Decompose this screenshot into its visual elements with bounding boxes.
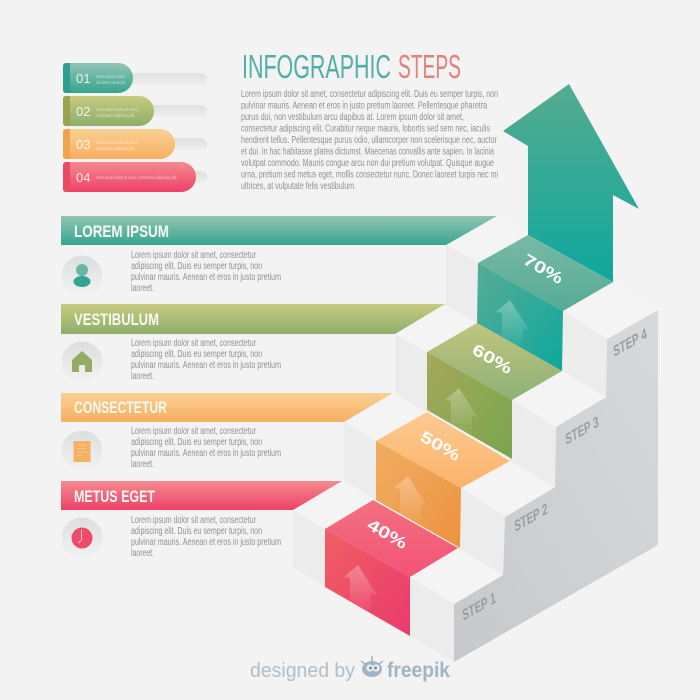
step labels: STEP 3 <box>564 413 600 449</box>
legend item 01 <box>63 63 207 93</box>
section: lorem ipsum <box>61 216 497 296</box>
section: consectetur <box>61 393 393 472</box>
legend item 01: lorem ipsum dolor <box>96 74 125 79</box>
text: lorem ipsum: laoreet. <box>131 283 154 294</box>
step 70 percent teal: 70% <box>520 250 566 288</box>
intro text block: urna, pretium sed metus eget, mollis consectetur nunc. Donec laoreet turpis nec mi <box>241 170 498 180</box>
legend item 02: lorem ipsum dolor sit amet, <box>96 107 138 112</box>
step 50 percent orange <box>376 412 510 548</box>
text: vestibulum: pulvinar mauris. Aenean et eros in justo pretium <box>131 360 281 371</box>
legend item 03: consectetur adipiscing elit. <box>96 146 135 151</box>
title: INFOGRAPHIC <box>242 48 391 85</box>
intro text block: Lorem ipsum dolor sit amet, consectetur adipiscing elit. Duis eu semper turpis, non <box>241 89 498 100</box>
text: metus eget: laoreet. <box>131 548 154 559</box>
text: lorem ipsum: adipiscing elit. Duis eu semper turpis, non <box>131 261 262 272</box>
step labels: STEP 2 <box>513 500 549 536</box>
legend item 02 <box>63 96 207 126</box>
legend item 04: lorem ipsum dolor sit amet, consectetur adipiscing elit. <box>96 175 177 180</box>
text: consectetur: adipiscing elit. Duis eu semper turpis, non <box>131 437 262 448</box>
step labels: STEP 4 <box>612 325 648 361</box>
intro text block: hendrerit tellus. Pellentesque purus odio, ullamcorper non scelerisque nec, auctor <box>241 135 497 146</box>
intro text block: ultrices, at vulputate felis vestibulum. <box>241 181 356 192</box>
step 60 percent olive: 60% <box>469 340 515 378</box>
heading: vestibulum: VESTIBULUM <box>74 310 159 329</box>
footer: designed by freepik <box>250 656 450 682</box>
step 70 percent teal <box>477 235 613 371</box>
heading: metus eget: METUS EGET <box>74 487 155 506</box>
step labels: STEP 1 <box>461 589 497 625</box>
text: metus eget <box>131 515 281 559</box>
icon: document <box>62 430 102 472</box>
icon: person <box>62 256 102 296</box>
text: vestibulum <box>131 338 281 382</box>
legend item 03: lorem ipsum dolor sit amet, <box>96 140 138 145</box>
section: metus eget <box>61 481 342 559</box>
text: lorem ipsum: pulvinar mauris. Aenean et eros in justo pretium <box>131 272 281 283</box>
text: consectetur: Lorem ipsum dolor sit amet, consectetur <box>131 426 256 437</box>
intro text block: consectetur adipiscing elit. Curabitur neque mauris, lobortis sed sem nec, iaculis <box>241 124 490 134</box>
step labels <box>461 325 648 625</box>
intro text block <box>241 89 498 192</box>
banner: vestibulum <box>61 304 445 334</box>
text: consectetur: pulvinar mauris. Aenean et eros in justo pretium <box>131 448 281 459</box>
legend item 03 <box>63 129 207 159</box>
stair side wall <box>454 310 658 662</box>
step 1 white blocks <box>293 481 503 662</box>
legend item 01: sit amet consecte <box>96 80 125 85</box>
step 3 white blocks <box>395 304 606 487</box>
banner: consectetur <box>61 393 393 422</box>
step 40 percent pink <box>325 500 458 636</box>
text: metus eget: pulvinar mauris. Aenean et eros in justo pretium <box>131 537 281 548</box>
big teal arrow <box>503 84 639 282</box>
legend item 02: consectetur adipiscing elit. <box>96 113 135 118</box>
staircase <box>293 216 658 662</box>
text: vestibulum: adipiscing elit. Duis eu semper turpis, non <box>131 349 262 360</box>
text: metus eget: Lorem ipsum dolor sit amet, consectetur <box>131 515 256 526</box>
footer: designed by freepik: freepik <box>387 659 450 682</box>
step 4 white blocks <box>446 216 658 397</box>
icon: freepik mascot <box>361 656 383 677</box>
step 40 percent pink: 40% <box>364 515 410 553</box>
intro text block: et dui. In hac habitasse platea dictumst. Maecenas convallis ante sapien. In lacinia <box>241 146 494 158</box>
intro text block: volutpat commodo. Mauris congue arcu non dui pretium volutpat. Quisque augue <box>241 158 494 169</box>
title: STEPS <box>398 48 461 85</box>
text: consectetur: laoreet. <box>131 459 154 470</box>
legend item 02: 02 <box>76 104 90 119</box>
heading: lorem ipsum: LOREM IPSUM <box>74 222 169 241</box>
legend item 03: 03 <box>76 137 90 152</box>
footer: designed by freepik: designed by <box>250 660 355 682</box>
banner: lorem ipsum <box>61 216 497 245</box>
panel: step legend pills <box>63 63 207 192</box>
legend item 04: 04 <box>76 170 90 185</box>
heading: consectetur: CONSECTETUR <box>74 398 167 417</box>
text: consectetur <box>131 426 281 470</box>
banner: metus eget <box>61 481 342 510</box>
section: vestibulum <box>61 304 445 382</box>
step 60 percent olive <box>427 323 562 459</box>
intro text block: pulvinar mauris. Aenean et eros in justo pretium laoreet. Pellentesque pharetra <box>241 100 487 112</box>
text: vestibulum: laoreet. <box>131 371 154 382</box>
text: lorem ipsum <box>131 250 281 294</box>
icon: house <box>62 342 102 382</box>
legend item 01: 01 <box>76 71 90 86</box>
intro text block: purus dui, non vestibulum arcu dapibus at. Lorem ipsum dolor sit amet, <box>241 112 464 123</box>
text: metus eget: adipiscing elit. Duis eu semper turpis, non <box>131 526 262 537</box>
legend item 04 <box>63 162 207 192</box>
step 2 white blocks <box>344 393 555 575</box>
text: lorem ipsum: Lorem ipsum dolor sit amet, consectetur <box>131 250 256 261</box>
step 50 percent orange: 50% <box>417 427 463 465</box>
icon: clock <box>62 518 102 558</box>
text: vestibulum: Lorem ipsum dolor sit amet, consectetur <box>131 338 256 349</box>
